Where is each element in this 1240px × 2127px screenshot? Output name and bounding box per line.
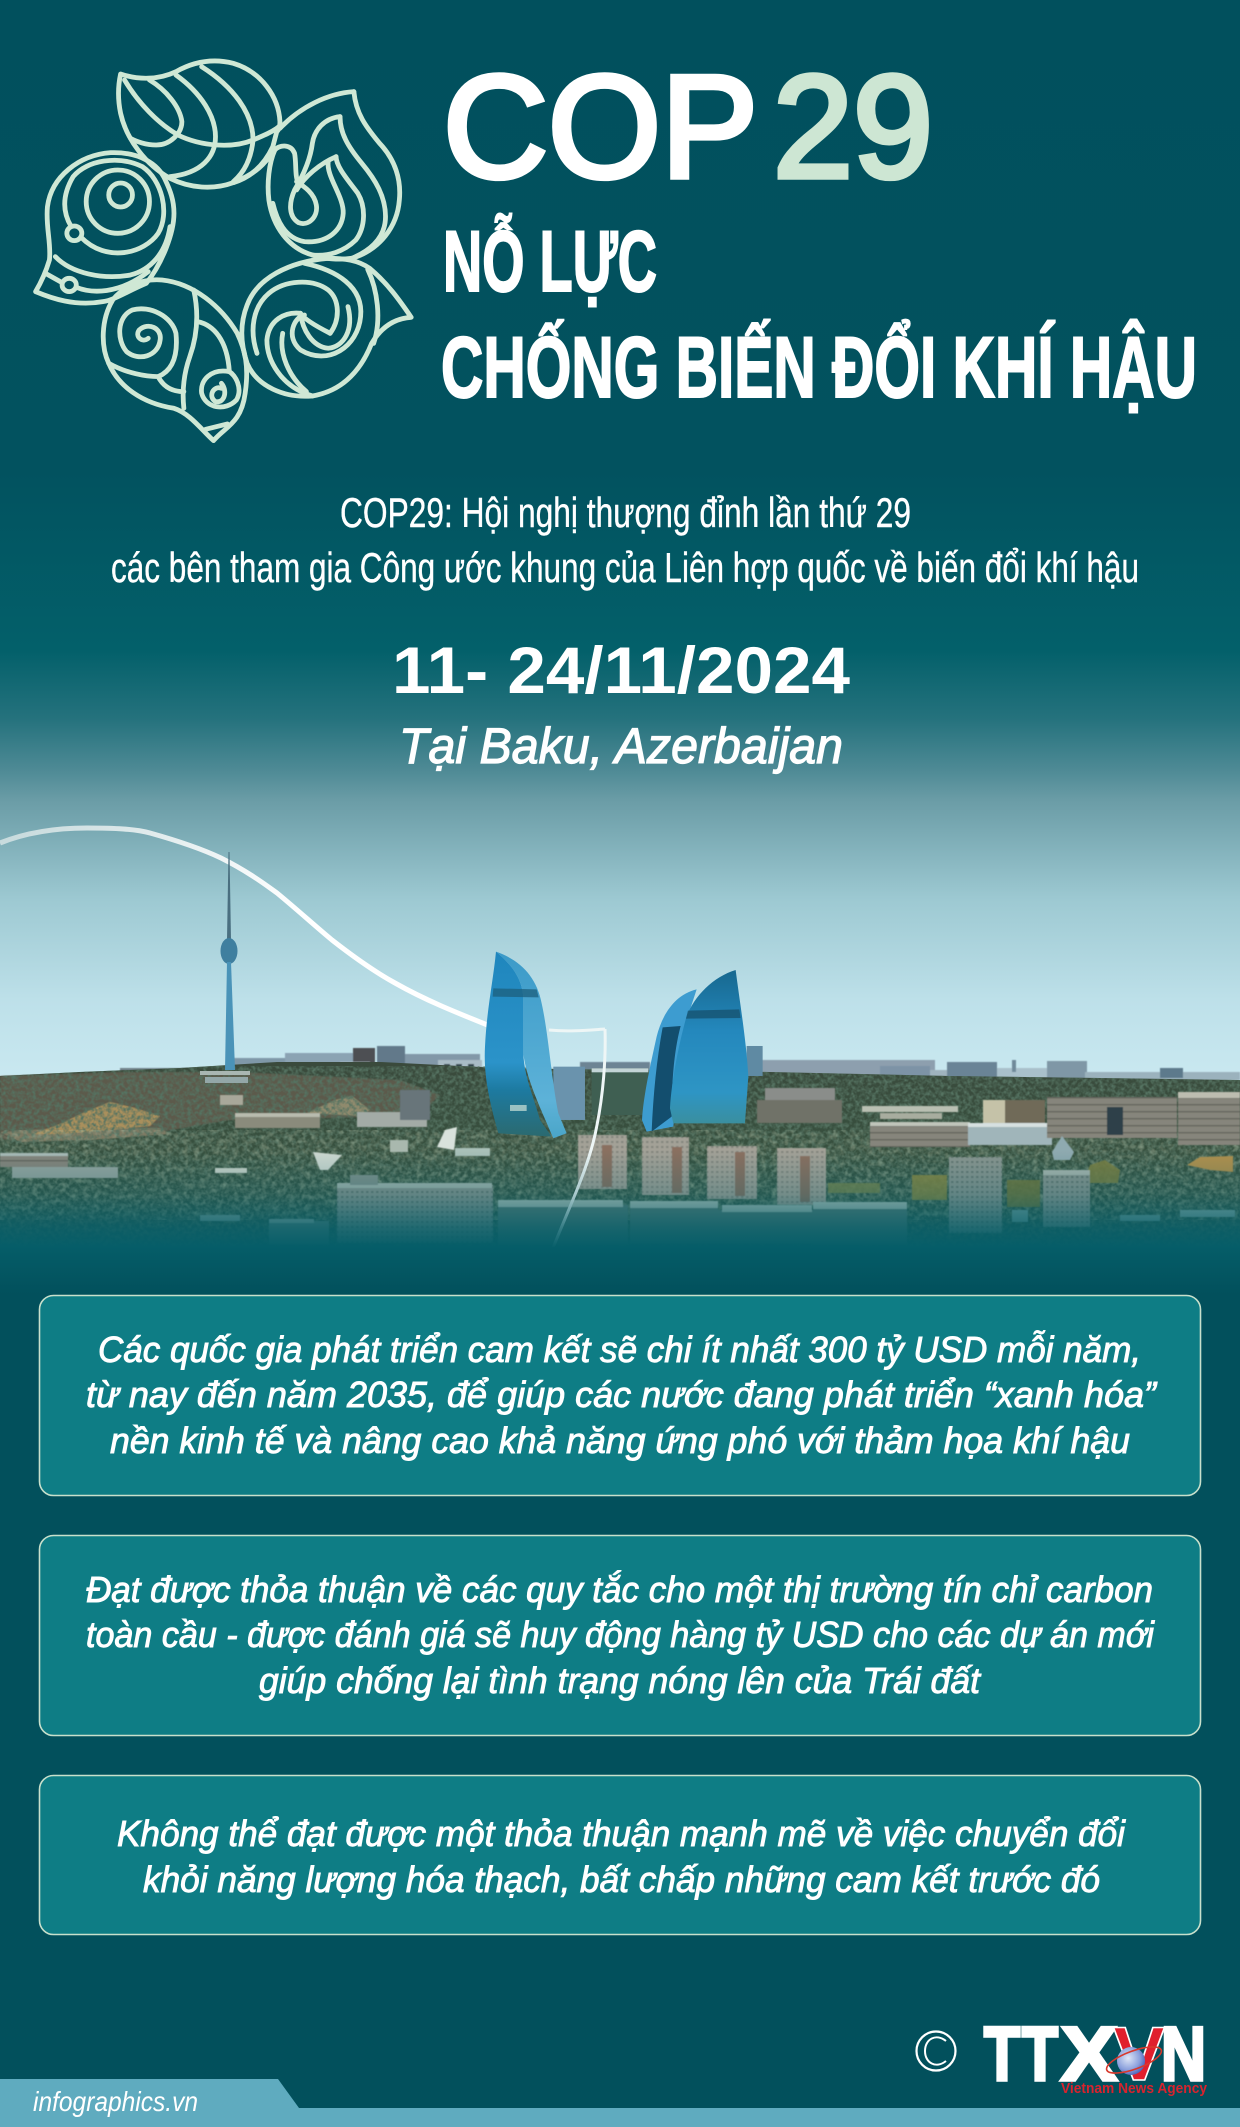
flame tower right, rear face (642, 989, 697, 1132)
buildings behind flame towers (553, 1046, 763, 1120)
light texture (0, 1130, 1240, 1220)
panel: fossil fuel transition (40, 1776, 1200, 1934)
hills left (0, 1072, 440, 1142)
letters TTX and N (984, 2012, 1206, 2097)
transition to background (0, 1247, 1240, 1295)
globe (1117, 2047, 1145, 2075)
sand patch (33, 1102, 160, 1134)
bottom fade (0, 1150, 1240, 1248)
panel 1 line 1: Các quốc gia phát triển cam kết sẽ chi ít nhất 300 tỷ USD mỗi năm, (98, 1329, 1141, 1370)
letters TTX and N: X (1061, 2012, 1117, 2097)
flame tower right, dark slot (652, 1026, 681, 1132)
panel box 2 (40, 1536, 1200, 1736)
letters TTX and N: T (984, 2012, 1020, 2097)
ground (0, 1062, 1240, 1250)
sand patch 2 (307, 1096, 370, 1116)
mid buildings right (757, 1088, 1240, 1160)
footer band (0, 2079, 1240, 2127)
panel: pledge of 300 billion USD (40, 1296, 1200, 1496)
residential towers (578, 1135, 1090, 1233)
flame tower left, rear face (496, 952, 567, 1138)
letters TTX and N: T (1022, 2012, 1058, 2097)
panel 3 line 1: Không thể đạt được một thỏa thuận mạnh mẽ về việc chuyển đổi (117, 1813, 1126, 1854)
panel box 3 (40, 1776, 1200, 1934)
vegetation patches (828, 1156, 1233, 1207)
low row buildings (269, 1175, 1235, 1245)
curve: white line lower (553, 1029, 605, 1248)
curve: white line upper (0, 828, 490, 1026)
flame tower right, front face (670, 970, 748, 1123)
curve: small connector (549, 1029, 605, 1031)
logo petal: swirl (242, 258, 411, 396)
panel 3 line 2: khỏi năng lượng hóa thạch, bất chấp những cam kết trước đó (143, 1859, 1100, 1900)
orbit (1104, 2042, 1164, 2078)
logo petal: leaf (119, 61, 280, 187)
date: 11- 24/11/2024 (392, 633, 850, 707)
flame tower left, bands (493, 988, 539, 997)
panel: carbon credit market (40, 1536, 1200, 1736)
panel 1 line 3: nền kinh tế và nâng cao khả năng ứng phó với thảm họa khí hậu (110, 1420, 1130, 1461)
lower background (0, 1240, 1240, 2127)
illustration: Baku skyline (0, 828, 1240, 1295)
TTXVN logo (984, 2012, 1208, 2097)
letters TTX and N: N (1161, 2012, 1206, 2097)
location: Tại Baku, Azerbaijan (399, 718, 843, 774)
far skyline (120, 1046, 1240, 1087)
panel box 1 (40, 1296, 1200, 1496)
heading line 1: NỖ LỰC (443, 214, 657, 310)
base of towers (510, 1105, 527, 1111)
TV tower (200, 852, 250, 1083)
mid buildings left (0, 1090, 490, 1221)
heading: Nỗ lực chống biến đổi khí hậu (441, 214, 1197, 416)
copyright symbol (916, 2032, 956, 2070)
Flame Towers (485, 952, 763, 1138)
flame tower right, bands (686, 1009, 741, 1019)
logo petal: rings (36, 153, 174, 303)
logo petal: flame (233, 92, 400, 259)
panel 2 line 2: toàn cầu - được đánh giá sẽ huy động hàng tỷ USD cho các dự án mới (86, 1614, 1155, 1655)
panel 2 line 1: Đạt được thỏa thuận về các quy tắc cho một thị trường tín chỉ carbon (86, 1569, 1153, 1610)
subtitle line 1: COP29: Hội nghị thượng đỉnh lần thứ 29 (340, 489, 911, 536)
agency name: Vietnam News Agency (1061, 2080, 1208, 2097)
flame tower left, front face (485, 952, 552, 1137)
panel 1 line 2: từ nay đến năm 2035, để giúp các nước đang phát triển “xanh hóa” (86, 1374, 1158, 1415)
title: COP29 (443, 45, 933, 208)
title word COP: COP (443, 45, 758, 208)
footer source text: infographics.vn (33, 2086, 198, 2117)
panel 2 line 3: giúp chống lại tình trạng nóng lên của Trái đất (259, 1660, 982, 1701)
tree texture (0, 1066, 1240, 1228)
subtitle text block (111, 489, 1139, 591)
title number 29: 29 (773, 45, 933, 208)
letter V: V (1113, 2012, 1165, 2097)
COP29 logo: leaf ring (36, 61, 411, 441)
logo petal: spiral (103, 280, 247, 441)
